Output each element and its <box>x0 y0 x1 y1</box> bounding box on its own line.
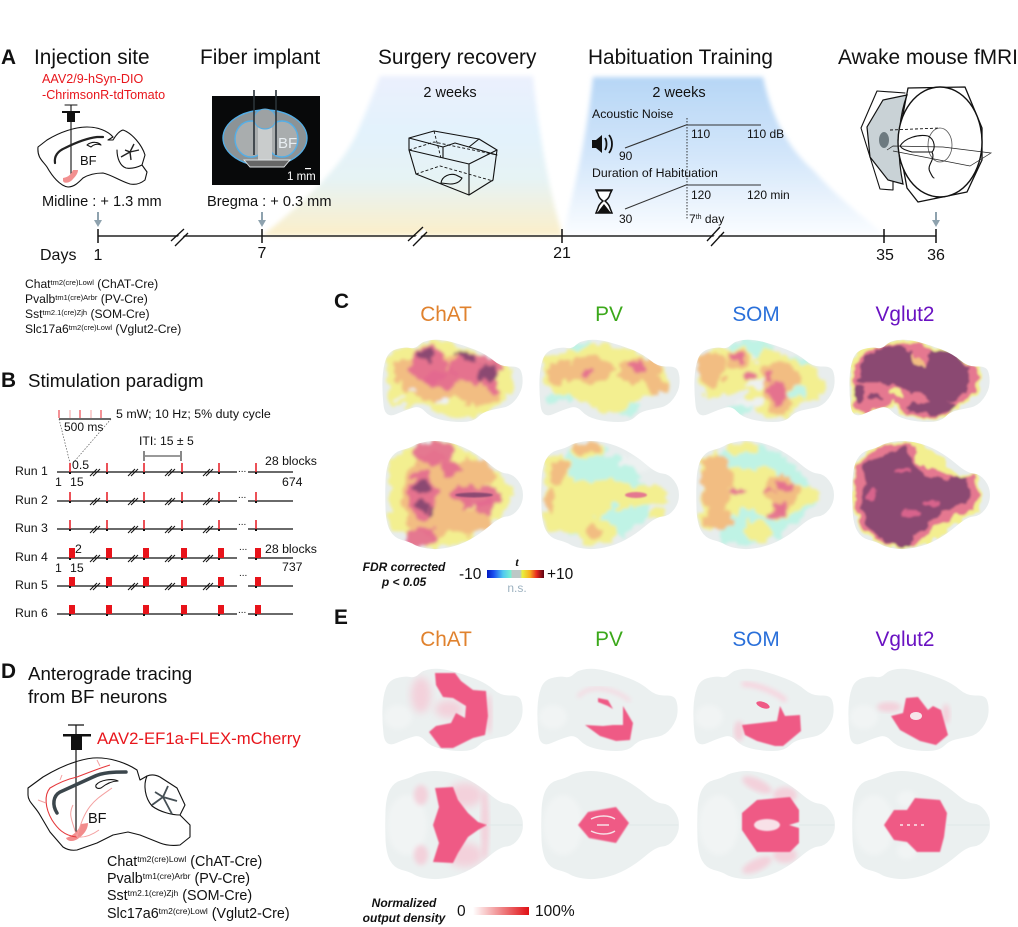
mouse strain list: Chat <box>25 277 51 291</box>
map: PV horizontal <box>541 441 679 549</box>
text: duration of habituation: Duration of Habituation <box>592 166 718 180</box>
mouse strain list <box>107 854 290 922</box>
image: fiber implant coronal section: BF <box>278 135 297 152</box>
legend: normalized output density <box>363 896 575 925</box>
run 4 <box>15 542 317 575</box>
dotted marker: 7th day <box>687 118 724 226</box>
panel letter B: B <box>1 369 16 392</box>
icon: syringe and mouse brain injection diagram: BF <box>80 153 97 168</box>
column heading: ChAT: ChAT <box>420 628 472 651</box>
diagram: syringe and brain with projections <box>28 725 190 850</box>
map: SOM horizontal <box>696 441 834 549</box>
run 6 <box>15 605 293 620</box>
legend: normalized output density: Normalized <box>372 896 437 910</box>
panel C: fMRI activation maps <box>334 290 990 595</box>
text: recovery duration: 2 weeks <box>423 85 477 101</box>
column heading: PV: PV <box>595 303 623 326</box>
run 1: 15 <box>70 475 84 489</box>
run 2 <box>15 490 293 507</box>
mouse strain list <box>25 277 181 336</box>
chart: habituation duration ramp: 120 min <box>747 188 790 202</box>
heading: injection site: Injection site <box>34 46 150 69</box>
text: acoustic noise: Acoustic Noise <box>592 107 673 121</box>
pulse train inset: 5 mW; 10 Hz; 5% duty cycle <box>116 407 271 421</box>
column heading: ChAT: ChAT <box>420 303 472 326</box>
icon: speaker <box>592 135 612 153</box>
mouse strain list: (PV-Cre) <box>190 871 250 887</box>
heading: fiber implant: Fiber implant <box>200 46 320 69</box>
legend: normalized output density: output density <box>363 911 447 925</box>
background: surgery recovery period <box>262 76 563 236</box>
mouse strain list: tm2.1(cre)Zjh <box>42 308 87 317</box>
map: ChAT horizontal density <box>385 771 523 879</box>
icon: mouse cage <box>409 131 497 195</box>
mouse strain list: (SOM-Cre) <box>87 307 150 321</box>
ITI interval marker: ITI: 15 ± 5 <box>139 434 194 448</box>
mouse strain list: (Vglut2-Cre) <box>208 906 290 922</box>
timeline labels: 21 <box>553 245 571 262</box>
legend: FDR correction and t colour scale: +10 <box>547 566 574 583</box>
column heading: Vglut2: Vglut2 <box>876 303 934 326</box>
run 1: Run 1 <box>15 464 48 478</box>
timeline labels: 1 <box>94 247 103 264</box>
chart: habituation duration ramp <box>619 185 790 226</box>
text: habituation duration: 2 weeks <box>652 85 706 101</box>
mouse strain list: Chat <box>107 854 137 870</box>
column heading: SOM: SOM <box>732 303 780 326</box>
run 1: 1 <box>55 475 62 489</box>
mouse strain list: tm1(cre)Arbr <box>143 871 191 881</box>
mouse strain list: tm2(cre)Lowl <box>69 323 112 332</box>
mouse strain list: Slc17a6 <box>25 322 69 336</box>
run 1: 674 <box>282 475 303 489</box>
mouse strain list: Pvalb <box>25 292 55 306</box>
pulse train inset <box>59 407 271 463</box>
run 4: ... <box>239 542 247 553</box>
run 1: ... <box>238 464 246 475</box>
heading: anterograde tracing: from BF neurons <box>28 686 167 707</box>
panel letter A: A <box>1 46 16 69</box>
run 4: 737 <box>282 560 303 574</box>
mouse strain list: tm1(cre)Arbr <box>55 293 98 302</box>
map: PV sagittal <box>539 340 680 422</box>
midline coordinate: Midline : + 1.3 mm <box>42 194 162 210</box>
legend: FDR correction and t colour scale: p < 0.05 <box>381 575 426 589</box>
dotted marker: 7th day: day <box>702 212 724 226</box>
icon: hourglass <box>596 190 612 213</box>
mouse strain list: Pvalb <box>107 871 143 887</box>
timeline labels: 35 <box>876 247 894 264</box>
mouse strain list: (PV-Cre) <box>97 292 148 306</box>
legend: FDR correction and t colour scale: FDR corrected <box>363 560 446 574</box>
heading: stimulation paradigm: Stimulation paradigm <box>28 370 204 391</box>
run 6: ... <box>238 605 246 616</box>
virus label <box>42 72 165 102</box>
run 1: 28 blocks <box>265 454 317 468</box>
ITI interval marker <box>139 434 194 461</box>
run 4: 2 <box>75 542 82 556</box>
dotted marker: 7th day: 7 <box>689 212 696 226</box>
mouse strain list: (SOM-Cre) <box>178 888 252 904</box>
mouse strain list: Sst <box>107 888 128 904</box>
mouse strain list: tm2.1(cre)Zjh <box>128 888 178 898</box>
run 4: Run 4 <box>15 550 48 564</box>
image: fiber implant coronal section: 1 mm <box>287 171 316 183</box>
map: PV sagittal density <box>537 669 678 751</box>
panel letter C: C <box>334 290 349 313</box>
run 6: Run 6 <box>15 606 48 620</box>
chart: habituation duration ramp: 120 <box>691 188 711 202</box>
map: ChAT horizontal <box>385 441 523 549</box>
pulse train inset: 500 ms <box>64 420 103 434</box>
icon: syringe and mouse brain injection diagram <box>38 105 147 187</box>
run 5: Run 5 <box>15 578 48 592</box>
heading: awake mouse fMRI: Awake mouse fMRI <box>838 46 1018 69</box>
legend: FDR correction and t colour scale: -10 <box>459 566 482 583</box>
chart: habituation duration ramp: 30 <box>619 212 633 226</box>
timeline labels: 7 <box>258 245 267 262</box>
mouse strain list: tm2(cre)Lowl <box>137 854 186 864</box>
mouse strain list: Sst <box>25 307 42 321</box>
timeline labels <box>40 245 945 264</box>
map: Vglut2 sagittal density <box>848 669 989 751</box>
map: ChAT sagittal density <box>382 669 523 751</box>
run 3 <box>15 517 293 535</box>
chart: acoustic noise ramp <box>619 125 784 163</box>
virus label: AAV2-EF1a-FLEX-mCherry <box>97 729 301 748</box>
dotted marker: 7th day: th <box>696 214 702 221</box>
map: SOM sagittal density <box>693 669 834 751</box>
heading: anterograde tracing: Anterograde tracing <box>28 663 192 684</box>
chart: acoustic noise ramp: 110 dB <box>747 127 784 141</box>
legend: normalized output density: 0 <box>457 903 466 920</box>
heading: anterograde tracing <box>28 663 192 707</box>
chart: acoustic noise ramp: 90 <box>619 149 633 163</box>
timeline labels: 36 <box>927 247 945 264</box>
heading: habituation training: Habituation Training <box>588 46 773 69</box>
run 2: ... <box>238 490 246 501</box>
column heading: SOM: SOM <box>732 628 780 651</box>
legend: FDR correction and t colour scale: t <box>515 555 519 569</box>
panel A: experimental timeline <box>1 46 1018 336</box>
virus label: -ChrimsonR-tdTomato <box>42 88 165 102</box>
run 3: Run 3 <box>15 521 48 535</box>
panel E: anterograde output density maps <box>334 606 990 925</box>
arrows on timeline <box>94 212 940 227</box>
mouse strain list: tm2(cre)Lowl <box>159 906 208 916</box>
legend: normalized output density: 100% <box>535 903 575 920</box>
legend: FDR correction and t colour scale <box>363 555 574 595</box>
run 4: 15 <box>70 561 84 575</box>
mouse strain list: (ChAT-Cre) <box>94 277 158 291</box>
mouse strain list: Slc17a6 <box>107 906 159 922</box>
mouse strain list: tm2(cre)Lowl <box>51 278 94 287</box>
diagram: syringe and brain with projections: BF <box>88 811 107 827</box>
run 5 <box>15 568 293 592</box>
virus label: AAV2/9-hSyn-DIO <box>42 72 143 86</box>
map: Vglut2 sagittal <box>849 340 990 422</box>
run 2: Run 2 <box>15 493 48 507</box>
run 1 <box>15 454 317 489</box>
run 4: 1 <box>55 561 62 575</box>
image: fiber implant coronal section <box>212 90 320 185</box>
bregma coordinate: Bregma : + 0.3 mm <box>207 194 332 210</box>
column heading: PV: PV <box>595 628 623 651</box>
map: SOM sagittal <box>694 339 835 422</box>
timeline axis <box>98 227 936 246</box>
panel letter D: D <box>1 660 16 683</box>
panel B: stimulation paradigm <box>1 369 317 620</box>
legend: FDR correction and t colour scale: n.s. <box>507 581 527 595</box>
timeline labels: Days <box>40 247 76 264</box>
map: Vglut2 horizontal <box>852 441 990 549</box>
panel letter E: E <box>334 606 348 629</box>
map: PV horizontal density <box>541 771 679 879</box>
run 4: 28 blocks <box>265 542 317 556</box>
run 3: ... <box>238 517 246 528</box>
run 1: 0.5 <box>72 458 89 472</box>
heading: surgery recovery: Surgery recovery <box>378 46 537 69</box>
map: SOM horizontal density <box>697 771 835 879</box>
panel D: anterograde tracing <box>1 660 301 922</box>
column heading: Vglut2: Vglut2 <box>876 628 934 651</box>
background: habituation training period <box>563 77 885 236</box>
chart: acoustic noise ramp: 110 <box>691 127 710 141</box>
run 5: ... <box>239 568 247 579</box>
icon: MRI scanner with mouse <box>861 87 991 202</box>
map: ChAT sagittal <box>382 340 523 422</box>
mouse strain list: (Vglut2-Cre) <box>112 322 181 336</box>
map: Vglut2 horizontal density <box>852 771 990 879</box>
mouse strain list: (ChAT-Cre) <box>186 854 262 870</box>
